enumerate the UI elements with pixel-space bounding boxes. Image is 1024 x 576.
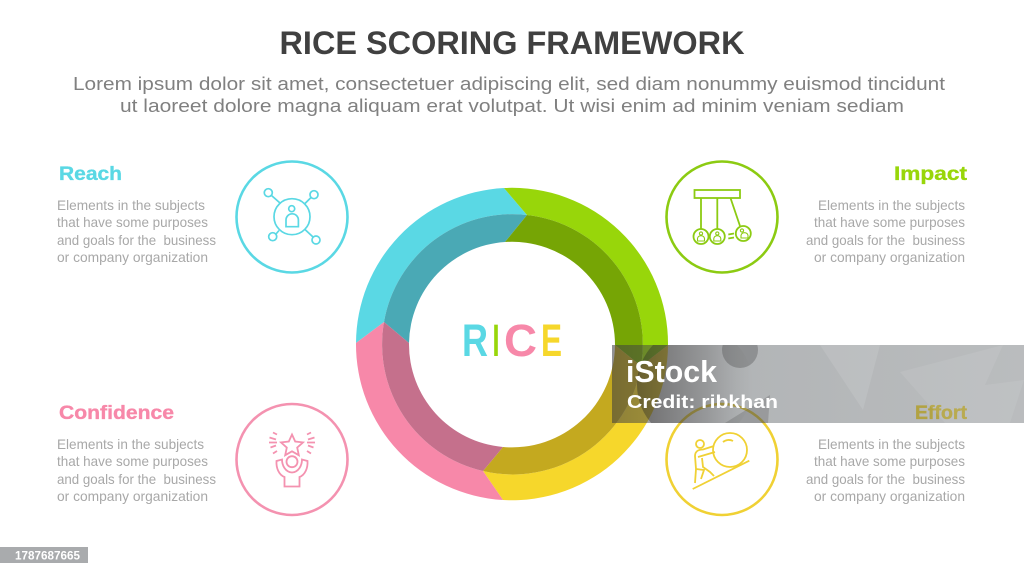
title: RICE SCORING FRAMEWORK <box>280 25 744 61</box>
center label RICE: E <box>541 315 562 366</box>
stock id tag <box>0 547 88 563</box>
segment: confidence pink <box>356 322 503 500</box>
panel: impact <box>666 162 968 272</box>
subtitle <box>73 73 945 116</box>
text block: reach: and goals for the business <box>57 232 216 248</box>
center label RICE: I <box>492 315 500 366</box>
icon: network person <box>236 162 348 272</box>
text block: reach <box>57 197 216 265</box>
text block: impact: Elements in the subjects <box>818 197 965 213</box>
heading: effort: Effort <box>915 403 968 424</box>
watermark credit: Credit: ribkhan <box>627 391 778 412</box>
text block: effort: Elements in the subjects <box>818 436 965 452</box>
stock id tag: 1787687665 <box>15 550 81 562</box>
text block: effort: or company organization <box>814 488 965 504</box>
text block: reach: Elements in the subjects <box>57 197 205 213</box>
watermark band <box>612 345 1024 423</box>
center label RICE <box>462 315 562 366</box>
text block: confidence <box>57 436 216 504</box>
segment: impact green <box>504 188 668 366</box>
text block: reach: or company organization <box>57 249 208 265</box>
icon: star and raised hands <box>236 404 348 515</box>
segment: effort yellow <box>483 345 668 500</box>
heading: reach: Reach <box>59 164 122 185</box>
text block: effort: that have some purposes <box>814 453 965 469</box>
text block: confidence: that have some purposes <box>57 453 208 469</box>
panel: reach <box>57 162 348 272</box>
text block: impact: that have some purposes <box>814 214 965 230</box>
subtitle: ut laoreet dolore magna aliquam erat volutpat. Ut wisi enim ad minim veniam sediam <box>120 95 904 116</box>
heading: impact: Impact <box>894 164 968 185</box>
text block: effort: and goals for the business <box>806 471 965 487</box>
icon: person pushing boulder <box>666 404 778 515</box>
ring diagram <box>356 188 668 500</box>
text block: confidence: Elements in the subjects <box>57 436 204 452</box>
segment: reach cyan <box>356 188 527 343</box>
panel: confidence <box>57 403 348 515</box>
watermark logo iStock: iStock <box>626 354 718 389</box>
center label RICE: R <box>462 315 488 366</box>
watermark background shapes <box>637 345 967 423</box>
text block: confidence: or company organization <box>57 488 208 504</box>
icon: newton cradle <box>666 162 778 272</box>
text block: reach: that have some purposes <box>57 214 208 230</box>
text block: impact: and goals for the business <box>806 232 965 248</box>
panel: effort <box>666 403 968 515</box>
subtitle: Lorem ipsum dolor sit amet, consectetuer adipiscing elit, sed diam nonummy euismod tincidunt <box>73 73 945 94</box>
text block: impact <box>806 197 965 265</box>
text block: confidence: and goals for the business <box>57 471 216 487</box>
text block: impact: or company organization <box>814 249 965 265</box>
center label RICE: C <box>504 315 537 366</box>
heading: confidence: Confidence <box>59 403 174 424</box>
text block: effort <box>806 436 965 504</box>
